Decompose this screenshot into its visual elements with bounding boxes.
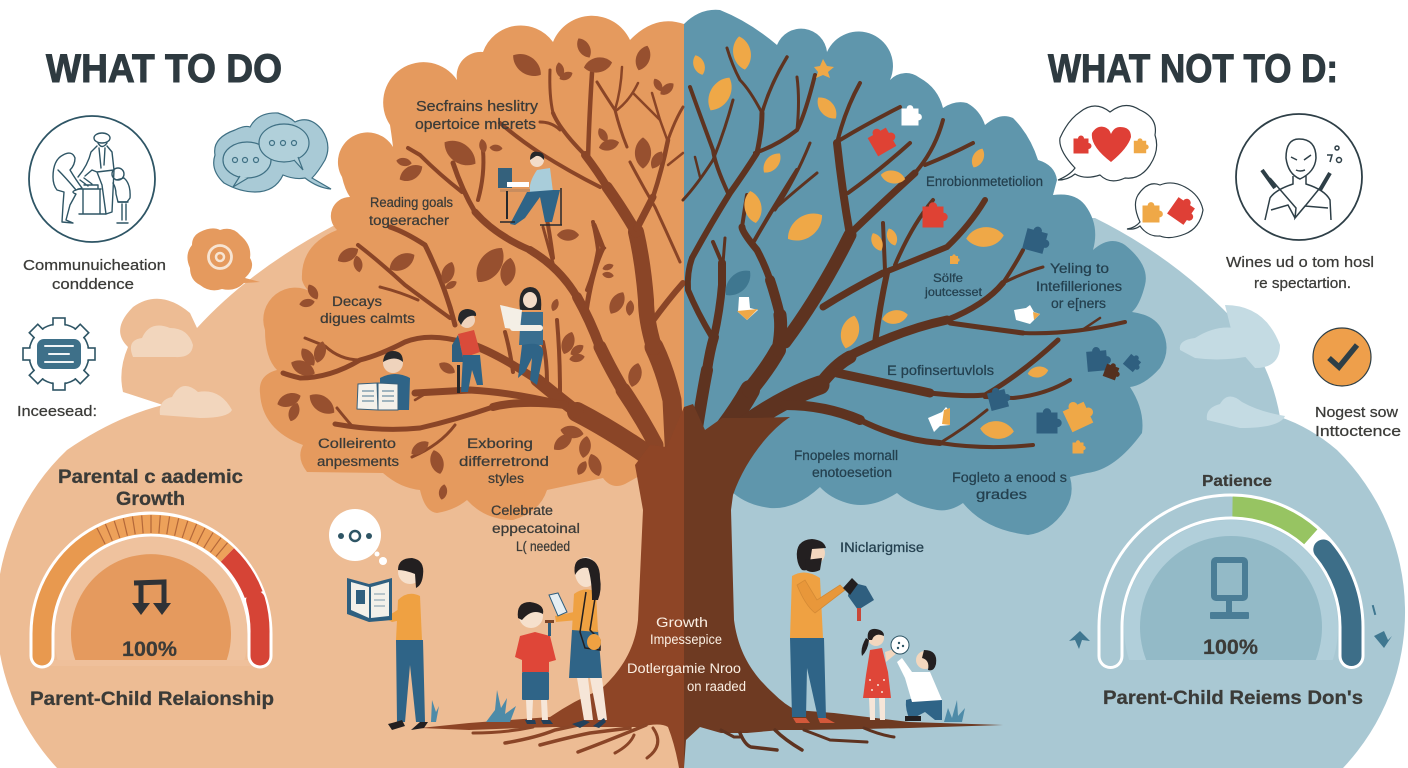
frustrated label: Wines ud o tom hosl xyxy=(1226,254,1374,271)
right tree labels: enotoesetion xyxy=(812,465,892,480)
kneeling boy xyxy=(897,650,942,721)
left tree labels: opertoice mlerets xyxy=(415,116,536,133)
small gauge arrows xyxy=(1069,605,1392,649)
right gauge caption: Parent-Child Reiems Don's xyxy=(1103,688,1363,709)
left tree labels: Secfrains heslitry xyxy=(416,98,539,115)
left gauge xyxy=(40,467,262,666)
increased label: Inceesead: xyxy=(17,403,97,420)
left tree leaves xyxy=(275,36,676,500)
bubble: heart and puzzle pieces xyxy=(1058,105,1157,181)
left tree labels: Celebrate xyxy=(491,503,553,518)
trunk labels: Growth xyxy=(656,615,708,630)
left tree labels: differretrond xyxy=(459,454,549,469)
right tree labels: or e[ners xyxy=(1051,296,1106,311)
title: what to do: WHAT TO DO xyxy=(46,47,282,91)
man with camera xyxy=(790,539,874,723)
right tree labels: Intefilleriones xyxy=(1036,279,1122,294)
right tree labels: joutcesset xyxy=(924,285,983,299)
child with open book in tree xyxy=(357,351,410,410)
trunk labels: Dotlergamie Nroo xyxy=(627,661,741,676)
right tree labels: Sölfe xyxy=(933,271,963,285)
right tree labels: E pofinsertuvlols xyxy=(887,363,994,378)
icon: parents and child at table xyxy=(29,116,155,242)
right canopy xyxy=(684,10,1167,535)
right trunk and roots xyxy=(684,404,1003,768)
right tree stars xyxy=(737,59,1040,432)
grass tufts left xyxy=(431,690,516,722)
gauge heading: parental academic growth: Growth xyxy=(116,489,185,510)
grass tuft right xyxy=(944,700,965,722)
left tree labels: Colleirento xyxy=(318,436,396,451)
right background hill xyxy=(684,218,1405,768)
left background hill xyxy=(0,226,684,768)
right tree labels: INiclarigmise xyxy=(840,540,924,555)
right tree labels: Enrobionmetetiolion xyxy=(926,174,1043,189)
gauge value: 100% xyxy=(1203,636,1258,659)
left tree labels: eppecatoinal xyxy=(492,521,580,536)
communication label: Communuicheation xyxy=(23,257,166,274)
left tree labels: anpesments xyxy=(317,454,399,469)
right tree branches xyxy=(683,48,1125,447)
right gauge xyxy=(1069,473,1392,660)
right tree labels: grades xyxy=(976,487,1027,502)
right tree labels xyxy=(794,174,1122,555)
left canopy xyxy=(260,16,684,520)
left tree labels: Decays xyxy=(332,294,382,309)
left tree labels: Reading goals xyxy=(370,195,453,210)
boy in red shirt xyxy=(515,602,556,724)
thought bubble with dots xyxy=(329,509,387,565)
left gauge caption: Parent-Child Relaionship xyxy=(30,689,274,710)
icon: speech bubbles cloud xyxy=(214,113,331,192)
girl in red dress xyxy=(862,629,898,720)
right tree labels: Yeling to xyxy=(1050,261,1109,276)
person at desk in tree xyxy=(498,152,562,225)
icon: target badge xyxy=(187,228,260,290)
check label: Inttoctence xyxy=(1315,423,1401,440)
right hill clouds xyxy=(1180,305,1285,428)
frustrated label: re spectartion. xyxy=(1254,275,1351,292)
check label: Nogest sow xyxy=(1315,404,1398,421)
woman reading in tree xyxy=(500,287,543,385)
left tree labels: Exboring xyxy=(467,436,533,451)
gauge icon: monitor xyxy=(1210,560,1249,619)
gauge heading: parental academic growth: Parental c aademic xyxy=(58,467,243,488)
frustrated label xyxy=(1226,254,1374,292)
left tree labels: digues calmts xyxy=(320,311,415,326)
title: what not to do: WHAT NOT TO D: xyxy=(1048,47,1338,91)
woman with tablet and bag xyxy=(549,557,607,728)
left tree branches xyxy=(283,67,683,462)
right tree blue leaf xyxy=(720,265,756,301)
trunk labels: Impessepice xyxy=(650,632,722,647)
gauge icon: down arrows xyxy=(132,582,171,615)
left tree labels: L( needed xyxy=(516,539,570,554)
right tree leaves xyxy=(690,35,1049,440)
right tree labels: Fogleto a enood s xyxy=(952,470,1067,485)
trunk labels xyxy=(627,615,746,694)
boy in red on branch xyxy=(452,309,483,393)
right tree labels: Fnopeles mornall xyxy=(794,448,898,463)
left trunk and roots xyxy=(420,407,684,768)
communication label xyxy=(23,257,166,293)
icon: gear with panel xyxy=(23,318,95,390)
gauge heading: patience: Patience xyxy=(1202,473,1272,490)
gauge value: 100% xyxy=(122,638,177,661)
adult reading book xyxy=(347,558,428,730)
gauge heading: parental academic growth xyxy=(58,467,243,510)
right tree puzzle pieces xyxy=(866,105,1145,453)
icon: check badge xyxy=(1313,328,1371,386)
bubble: puzzle pieces xyxy=(1127,183,1203,238)
trunk labels: on raaded xyxy=(687,679,746,694)
magnifier xyxy=(891,636,909,654)
left hill clouds xyxy=(131,326,232,418)
check label xyxy=(1315,404,1401,440)
left tree labels xyxy=(317,98,580,554)
icon: frustrated person xyxy=(1236,114,1362,240)
communication label: conddence xyxy=(52,276,134,293)
left tree labels: togeeracher xyxy=(369,213,450,228)
left tree labels: styles xyxy=(488,471,524,486)
